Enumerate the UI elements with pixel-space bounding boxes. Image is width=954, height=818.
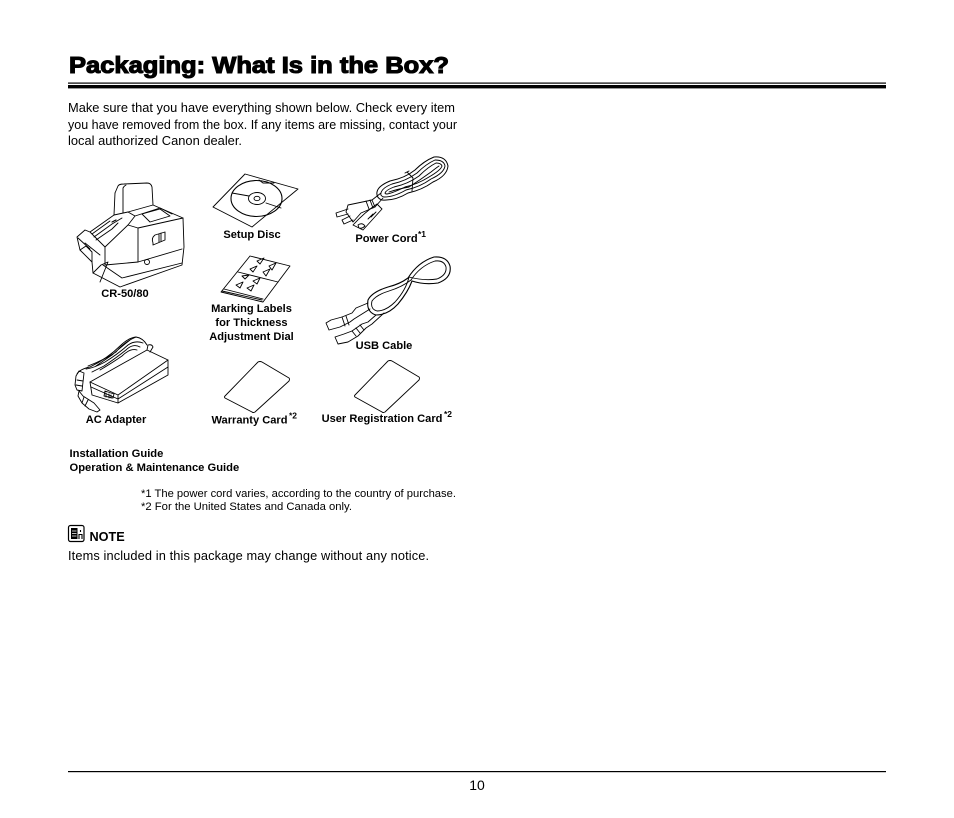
page number: 10	[469, 777, 485, 793]
note text: Items included in this package may change without any notice.	[68, 548, 429, 563]
footnotes: *1 The power cord varies, according to the country of purchase.	[141, 488, 456, 500]
guides list: Installation Guide	[70, 448, 163, 460]
guides list: Operation & Maintenance Guide	[70, 462, 239, 474]
label: setup disc: Setup Disc	[223, 229, 281, 241]
label: warranty card: Warranty Card	[211, 414, 288, 426]
icon: warranty card	[224, 362, 290, 412]
icon: marking labels	[221, 256, 290, 302]
label: power cord	[355, 229, 426, 245]
intro text: Make sure that you have everything shown below. Check every item	[68, 100, 455, 115]
label: usb cable: USB Cable	[356, 340, 412, 352]
label: user registration card: *2	[444, 409, 452, 419]
icon: note	[68, 526, 84, 542]
label: warranty card	[211, 410, 297, 426]
footnotes	[141, 488, 456, 513]
label: marking labels: for Thickness	[215, 317, 288, 329]
icon: setup disc	[213, 174, 298, 227]
label: marking labels: Marking Labels	[211, 303, 292, 315]
title: Packaging: What Is in the Box?	[69, 52, 449, 78]
label: warranty card: *2	[289, 410, 297, 420]
label: marking labels: Adjustment Dial	[209, 331, 294, 343]
footer rule	[68, 771, 886, 772]
label: user registration card: User Registration Card	[322, 413, 443, 425]
label: power cord: *1	[418, 229, 426, 239]
icon: user registration card	[354, 360, 420, 412]
label: user registration card	[322, 409, 452, 425]
label: power cord: Power Cord	[355, 233, 418, 245]
guides list	[70, 448, 239, 474]
icon: usb cable	[326, 257, 450, 344]
label: marking labels	[209, 303, 294, 343]
label: CR-50/80: CR-50/80	[101, 288, 149, 300]
intro text: local authorized Canon dealer.	[68, 133, 242, 148]
label: ac adapter: AC Adapter	[86, 414, 147, 426]
icon: power cord	[336, 157, 448, 230]
icon: scanner	[77, 183, 184, 287]
intro text	[68, 100, 458, 148]
icon: ac adapter	[75, 337, 168, 412]
note heading: NOTE	[90, 530, 125, 544]
footnotes: *2 For the United States and Canada only.	[141, 501, 352, 513]
intro text: you have removed from the box. If any items are missing, contact your	[68, 117, 458, 132]
title rule	[68, 82, 886, 88]
